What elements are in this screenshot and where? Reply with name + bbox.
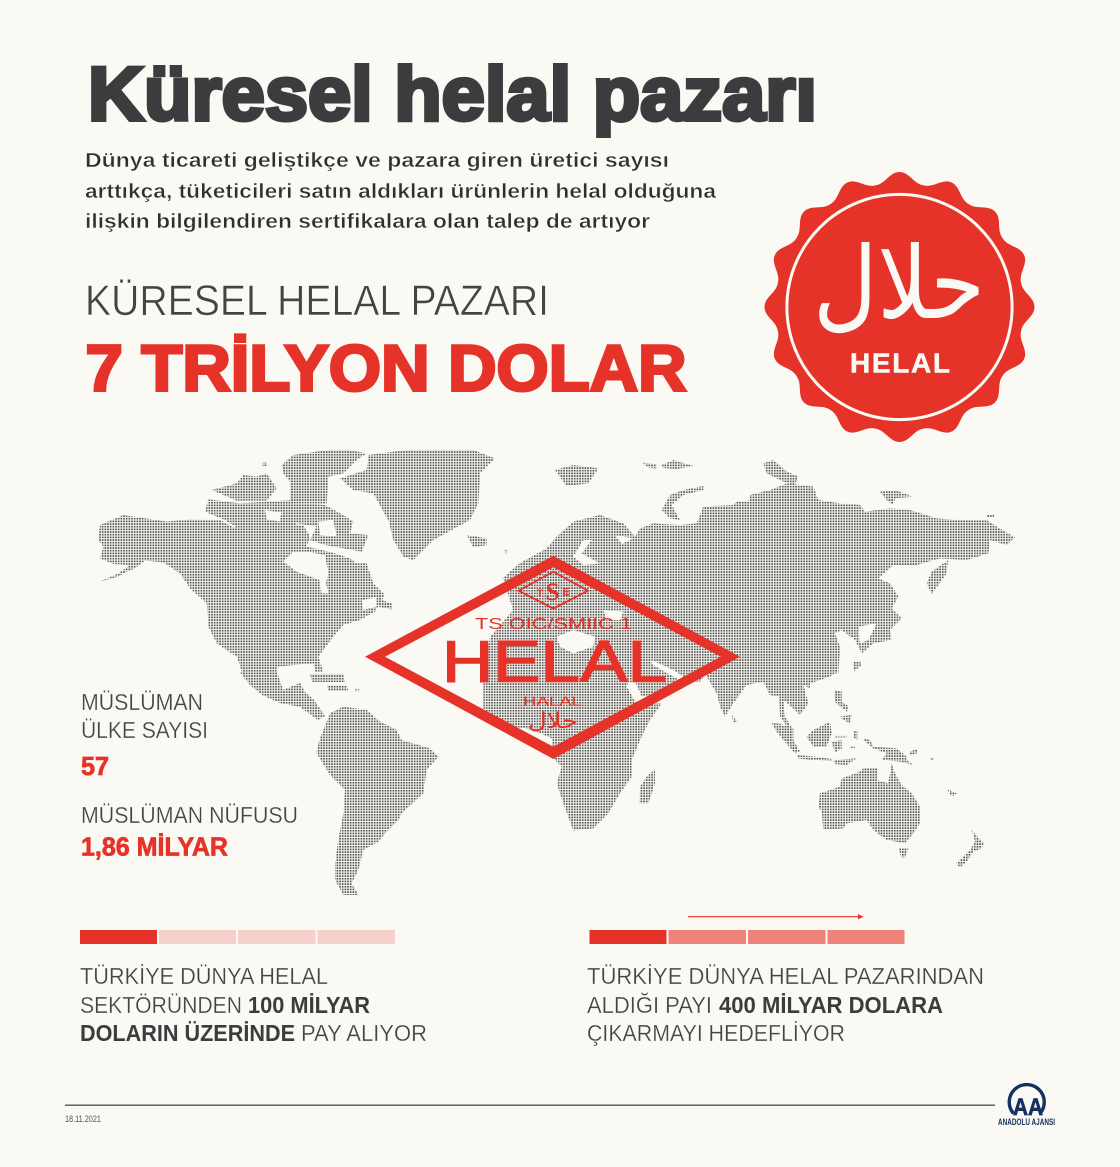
stat: Muslim population: 1,86 MİLYAR [81, 832, 228, 862]
logo: Anadolu Ajansı: ANADOLU AJANSI [998, 1117, 1055, 1128]
logo: TSE OIC/SMIIC halal certification mark: HELAL [442, 630, 667, 695]
text: target share of Turkey: ALDIĞI PAYI [587, 992, 712, 1018]
text: current share of Turkey: SEKTÖRÜNDEN [80, 992, 242, 1018]
text: target share of Turkey: 400 MİLYAR DOLARA [719, 992, 943, 1018]
logo: TSE OIC/SMIIC halal certification mark [365, 556, 740, 759]
arrow [688, 914, 864, 919]
stat: number of Muslim countries: ÜLKE SAYISI [81, 717, 208, 743]
logo: TSE OIC/SMIIC halal certification mark: E [562, 586, 570, 598]
logo: TSE OIC/SMIIC halal certification mark: T [537, 588, 544, 600]
world map (dotted) [85, 450, 1030, 900]
headline value: 7 trillion dollars: 7 TRİLYON DOLAR [86, 332, 686, 404]
logo: Anadolu Ajansı: AA [1013, 1094, 1043, 1121]
text: current share of Turkey: TÜRKİYE DÜNYA HELAL [80, 963, 328, 989]
intro text: ilişkin bilgilendiren sertifikalara olan talep de artıyor [85, 210, 650, 233]
icon: halal seal badge: HELAL [850, 348, 950, 378]
logo: TSE OIC/SMIIC halal certification mark: حلال [528, 709, 578, 734]
text: current share of Turkey: 100 MİLYAR [248, 992, 370, 1018]
text: current share of Turkey [80, 963, 427, 1046]
stat: number of Muslim countries [81, 689, 208, 781]
intro text [85, 149, 717, 233]
stat: number of Muslim countries: 57 [81, 751, 109, 781]
logo: TSE OIC/SMIIC halal certification mark: TS OIC/SMIIC 1 [475, 616, 632, 633]
stat: number of Muslim countries: MÜSLÜMAN [81, 689, 203, 715]
title: Küresel helal pazarı [88, 52, 817, 137]
logo: TSE OIC/SMIIC halal certification mark: HALAL [523, 695, 582, 709]
text: current share of Turkey: PAY ALIYOR [301, 1020, 427, 1046]
text: target share of Turkey: ÇIKARMAYI HEDEFLİYOR [587, 1020, 845, 1046]
text: target share of Turkey: TÜRKİYE DÜNYA HELAL PAZARINDAN [587, 963, 984, 989]
progress bar: current share [80, 930, 395, 944]
text: current share of Turkey: DOLARIN ÜZERİNDE [80, 1020, 295, 1046]
intro text: arttıkça, tüketicileri satın aldıkları ürünlerin helal olduğuna [85, 180, 717, 203]
text: target share of Turkey [587, 963, 984, 1046]
icon: halal seal badge: حلال [813, 225, 985, 342]
heading: global halal market: KÜRESEL HELAL PAZARI [85, 277, 549, 325]
logo: Anadolu Ajansı [998, 1085, 1055, 1128]
icon: halal seal badge [764, 172, 1034, 442]
logo: TSE OIC/SMIIC halal certification mark: S [546, 579, 559, 606]
intro text: Dünya ticareti geliştikçe ve pazara giren üretici sayısı [85, 149, 669, 172]
stat: Muslim population: MÜSLÜMAN NÜFUSU [81, 802, 298, 828]
stat: Muslim population [81, 802, 298, 862]
progress bar: target share [590, 930, 904, 944]
footer line and date: 18.11.2021 [65, 1114, 101, 1124]
